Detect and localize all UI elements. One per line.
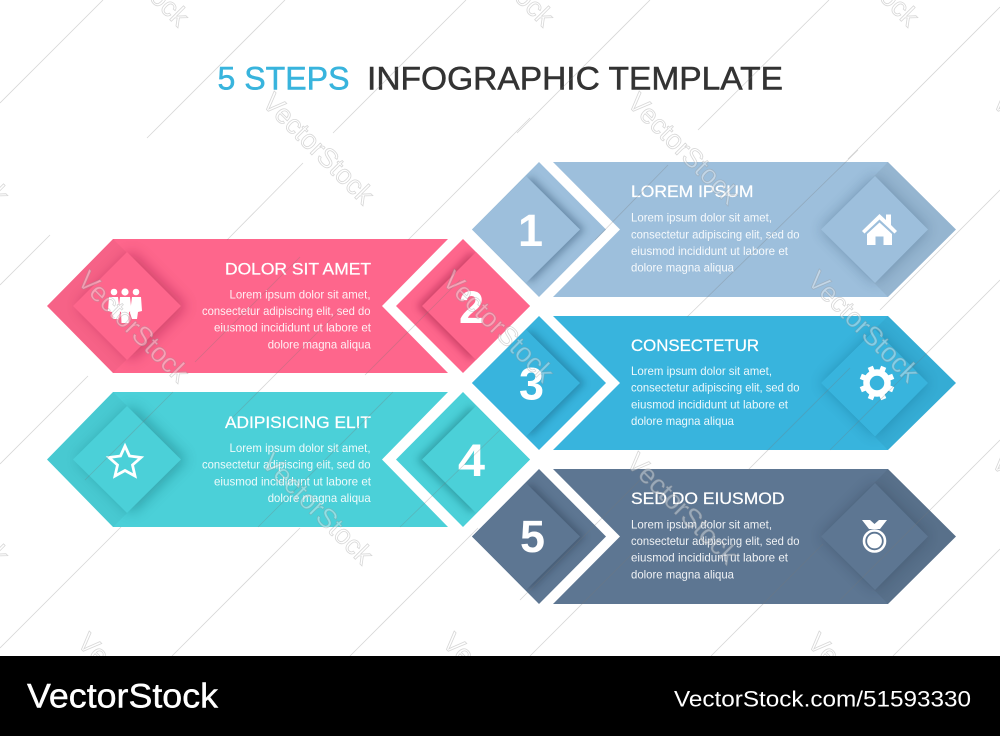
watermark text: VectorStock [802, 265, 925, 389]
text block: step 2: eiusmod incididunt ut labore et [214, 321, 372, 335]
title: INFOGRAPHIC TEMPLATE [367, 60, 783, 96]
panel: step 2 dolor sit amet [47, 239, 530, 373]
step 1 number diamond [472, 162, 606, 297]
text block: step 5: eiusmod incididunt ut labore et [631, 551, 789, 565]
text block: step 4: consectetur adipiscing elit, sed do [202, 458, 371, 472]
text block: step 2: consectetur adipiscing elit, sed do [202, 304, 371, 318]
number 5: 5 [520, 511, 545, 562]
text block: step 4: eiusmod incididunt ut labore et [214, 474, 372, 488]
text block: step 2: dolore magna aliqua [268, 337, 371, 351]
step 5 bar [553, 469, 956, 604]
number 2: 2 [459, 282, 484, 333]
text block: step 5: Lorem ipsum dolor sit amet, [631, 517, 772, 531]
watermark text: VectorStock [257, 87, 380, 211]
text block: step 5: dolore magna aliqua [631, 567, 734, 581]
text block: step 4: dolore magna aliqua [268, 491, 371, 505]
step 5 number diamond [472, 469, 606, 604]
text block: step 3: Lorem ipsum dolor sit amet, [631, 364, 772, 378]
step 1 bar [553, 162, 956, 297]
watermark text: VectorStock [256, 447, 379, 571]
text block: step 3: dolore magna aliqua [631, 414, 734, 428]
icon: medal [862, 520, 887, 552]
text block: step 1: consectetur adipiscing elit, sed do [631, 227, 800, 241]
text block: step 1: dolore magna aliqua [631, 261, 734, 275]
heading: consectetur: CONSECTETUR [631, 337, 759, 355]
panel: step 4 adipisicing elit [47, 392, 530, 527]
number 1: 1 [518, 205, 543, 256]
heading: lorem ipsum: LOREM IPSUM [631, 183, 754, 201]
watermark text: VectorStock [72, 265, 195, 389]
panel: step 1 lorem ipsum [472, 162, 956, 297]
footer band [0, 656, 1000, 736]
step 2 number diamond [396, 239, 530, 373]
heading: sed do eiusmod: SED DO EIUSMOD [631, 490, 785, 508]
text block: step 1: eiusmod incididunt ut labore et [631, 244, 789, 258]
step 4 number diamond [396, 392, 530, 527]
panel: step 3 consectetur [472, 316, 956, 450]
footer logo: VectorStock [27, 677, 219, 715]
icon: house [862, 214, 897, 245]
heading: adipisicing elit: ADIPISICING ELIT [225, 414, 371, 432]
title: 5 STEPS [218, 60, 350, 96]
footer url: VectorStock.com/51593330 [674, 687, 971, 712]
step 4 bar [47, 392, 448, 527]
icon: people [108, 288, 142, 323]
step 3 bar [553, 316, 956, 450]
watermark text: VectorStock [437, 265, 560, 389]
text block: step 3 [631, 364, 800, 428]
text block: step 1: Lorem ipsum dolor sit amet, [631, 211, 772, 225]
text block: step 2 [202, 287, 372, 351]
step 3 number diamond [472, 316, 606, 450]
text block: step 1 [631, 211, 800, 275]
icon: star [109, 446, 141, 476]
text block: step 3: consectetur adipiscing elit, sed do [631, 381, 800, 395]
step 2 bar [47, 239, 448, 373]
text block: step 5 [631, 517, 800, 581]
text block: step 5: consectetur adipiscing elit, sed do [631, 534, 800, 548]
text block: step 2: Lorem ipsum dolor sit amet, [230, 287, 370, 301]
text block: step 4: Lorem ipsum dolor sit amet, [230, 441, 370, 455]
number 4: 4 [458, 435, 485, 486]
panel: step 5 sed do eiusmod [472, 469, 956, 604]
watermark text: VectorStock [622, 87, 745, 211]
icon: gear [854, 360, 900, 406]
watermark text: VectorStock [621, 447, 744, 571]
text block: step 3: eiusmod incididunt ut labore et [631, 397, 789, 411]
text block: step 4 [202, 441, 372, 505]
number 3: 3 [519, 358, 544, 410]
heading: dolor sit amet: DOLOR SIT AMET [225, 260, 371, 278]
